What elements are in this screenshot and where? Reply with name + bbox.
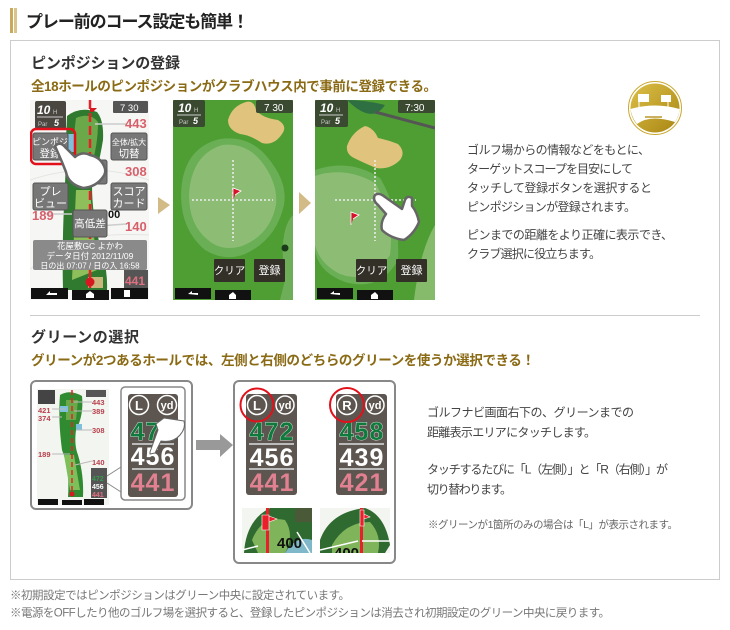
mini course map (37, 389, 109, 505)
mini course map: 389 (92, 407, 105, 416)
screen buttons: 7 30 (264, 103, 284, 114)
L distance panel: 472 (250, 418, 294, 446)
footnotes: ※初期設定ではピンポジションはグリーン中央に設定されています。 (10, 588, 350, 602)
menu buttons: 登録 (40, 147, 61, 160)
bunker (347, 126, 403, 168)
distance labels: 308 (125, 164, 147, 179)
thumbnail: left green: 400 (277, 535, 302, 552)
mini course map: 374 (38, 414, 51, 423)
mini course map: 140 (92, 458, 105, 467)
icon: gold medal (628, 82, 682, 134)
text block: green selection description: タッチするたびに「L（左側）」と「R（右側）」が (427, 462, 668, 476)
screen buttons: クリア (356, 265, 387, 277)
text block: pin position description: クラブ選択に役立ちます。 (467, 246, 601, 261)
menu buttons: 全体/拡大 (112, 137, 146, 147)
heading: green selection: グリーンの選択 (31, 328, 139, 346)
screen buttons: 10 (320, 101, 334, 115)
screen buttons: 7:30 (405, 103, 425, 114)
flag (351, 212, 359, 225)
mini course map: 456 (92, 484, 104, 491)
screen 1: course map with menu (30, 100, 149, 300)
footnotes (10, 588, 610, 620)
arrow 3 (196, 434, 233, 457)
text block: pin position description: タッチして登録ボタンを選択すると (467, 180, 652, 195)
menu buttons (32, 133, 147, 237)
mini course map: 421 (38, 406, 51, 415)
menu buttons: ビュー (34, 197, 67, 210)
course info box (33, 240, 148, 288)
scope crosshair (335, 160, 416, 241)
zoomed distance panel: 441 (131, 469, 175, 497)
screen buttons: 登録 (400, 263, 422, 277)
menu buttons: 切替 (118, 147, 140, 160)
heading: pin position: ピンポジションの登録 (31, 54, 180, 72)
note: single green: ※グリーンが1箇所のみの場合は「L」が表示されます。 (428, 518, 678, 531)
zoomed distance panel: 456 (131, 443, 175, 471)
screen buttons: クリア (214, 265, 245, 277)
R distance panel: 421 (340, 469, 384, 497)
zoomed distance panel (121, 387, 185, 500)
R distance panel: R (342, 398, 352, 413)
screen buttons: 5 (193, 116, 199, 126)
R distance panel (336, 394, 387, 497)
text block: green selection description: ゴルフナビ画面右下の、グリーンまでの (427, 404, 634, 420)
top info plates: 7 30 (120, 103, 138, 114)
R distance panel: yd (369, 400, 381, 412)
text block: green selection description: 距離表示エリアにタッチします。 (427, 426, 596, 440)
thumbnail: right green (320, 508, 390, 553)
screen 3: pin registered (315, 100, 435, 300)
course info box: データ日付 2012/11/09 (47, 251, 134, 261)
text block: pin position description: ピンポジションが登録されます。 (467, 199, 636, 214)
mini course map: 308 (92, 426, 105, 435)
top info plates: 5 (54, 118, 60, 128)
text block: pin position description: ターゲットスコープを目安にして (467, 162, 633, 176)
mini course map: 443 (92, 398, 105, 407)
R distance panel: 458 (340, 418, 384, 446)
screen buttons (315, 100, 435, 300)
menu buttons: 高低差 (74, 217, 106, 230)
screen buttons: Par (179, 120, 188, 126)
course info box: 441 (125, 274, 145, 288)
subheading: pin position: 全18ホールのピンポジションがクラブハウス内で事前に登録できる。 (31, 78, 437, 94)
screen buttons (173, 100, 293, 300)
top info plates: Par (38, 122, 47, 128)
screen buttons: H (194, 108, 198, 114)
text block: pin position description: ピンまでの距離をより正確に表示でき、 (467, 227, 673, 242)
zoomed distance panel: 472 (131, 418, 175, 446)
L distance panel: 441 (250, 469, 294, 497)
icon: pointing hand (150, 418, 184, 454)
text block: pin position description: ゴルフ場からの情報などをもとに、 (467, 142, 650, 157)
menu buttons: カード (112, 197, 146, 210)
screen 2: green view (173, 100, 293, 300)
distance labels: 189 (32, 208, 54, 223)
L distance panel (246, 394, 297, 497)
text block: green selection description (427, 404, 668, 496)
menu buttons: プレ (40, 185, 62, 198)
course info box: 日の出 07:07 / 日の入 16:58 (40, 260, 140, 270)
course info box: 花屋敷GC よかわ (57, 241, 123, 251)
arrow 1 (158, 197, 170, 214)
bunker (228, 102, 284, 144)
red highlight circles (240, 388, 364, 422)
arrow 2 (299, 192, 311, 214)
L distance panel: L (253, 398, 261, 413)
distance labels: 443 (125, 116, 147, 131)
screen buttons: Par (321, 120, 330, 126)
zoomed distance panel: yd (161, 400, 173, 412)
menu buttons: ピンポジ (32, 137, 68, 147)
top info plates: 10 (37, 103, 51, 117)
card: touch distance area (31, 381, 192, 509)
text block: green selection description: 切り替わります。 (427, 482, 512, 496)
icon: pointing hand (55, 144, 105, 188)
thumbnail: left green (242, 508, 312, 553)
card: left and right green switch (234, 381, 395, 563)
screen buttons: 10 (178, 101, 192, 115)
screen buttons: H (336, 108, 340, 114)
mini course map: 441 (92, 492, 104, 499)
scope crosshair (192, 160, 273, 241)
screen buttons: 5 (335, 116, 341, 126)
zoomed distance panel: L (135, 398, 143, 413)
text block: pin position description (467, 142, 673, 261)
top info plates: H (53, 110, 57, 116)
thumbnail: right green: 400 (334, 545, 359, 562)
bottom navigation (31, 288, 148, 300)
R distance panel: 439 (340, 444, 384, 472)
top info plates (35, 101, 148, 129)
distance labels (32, 116, 147, 234)
L distance panel: yd (279, 400, 291, 412)
footnotes: ※電源をOFFしたり他のゴルフ場を選択すると、登録したピンポジションは消去され初期設定のグリーン中央に戻ります。 (10, 606, 610, 620)
icon: pointing hand (374, 194, 419, 240)
menu buttons: スコア (112, 186, 146, 198)
mini course map: 189 (38, 450, 51, 459)
screen buttons: 登録 (258, 263, 280, 277)
mini course map: 472 (92, 476, 104, 483)
distance labels: 140 (125, 219, 147, 234)
subheading: green selection: グリーンが2つあるホールでは、左側と右側のどちらのグリーンを使うか選択できる！ (31, 352, 535, 368)
flag (233, 188, 241, 201)
L distance panel: 456 (250, 444, 294, 472)
selection highlight (31, 129, 75, 164)
title: プレー前のコース設定も簡単！ (26, 12, 249, 32)
distance labels: 00 (108, 209, 120, 221)
